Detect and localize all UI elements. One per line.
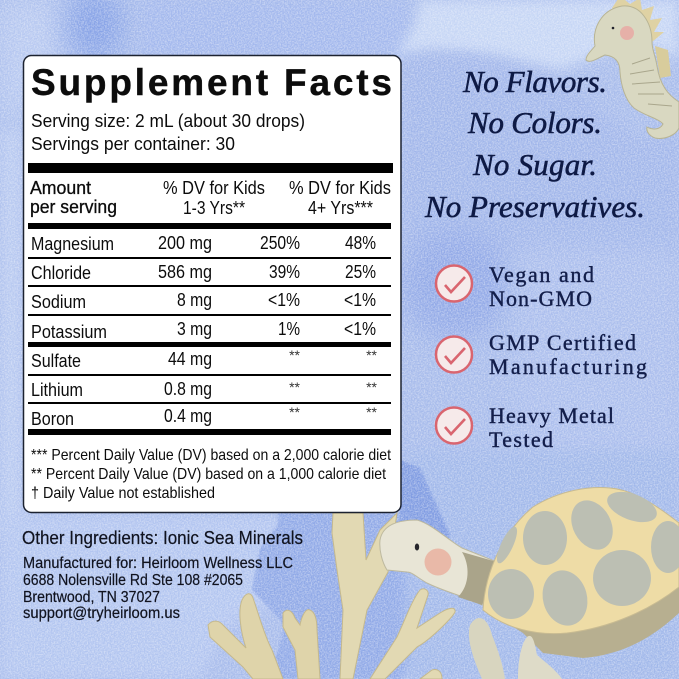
claims: no additives: No Flavors. <box>462 64 607 99</box>
table rows: nutrients: 200 mg <box>158 233 212 253</box>
claims: no additives <box>424 64 645 224</box>
manufacturer address: Manufactured for: Heirloom Wellness LLC <box>23 555 293 572</box>
illustration: turtle <box>380 486 679 679</box>
table rows: nutrients: Magnesium <box>31 234 114 254</box>
icon: check heavy metal <box>436 408 472 444</box>
table rows: nutrients: <1% <box>344 319 376 339</box>
claim: gmp: GMP Certified <box>489 330 636 355</box>
table rows: nutrients: ** <box>289 404 301 420</box>
table rows: nutrients: 39% <box>269 262 300 282</box>
footnotes <box>31 447 391 502</box>
other ingredients: Other Ingredients: Ionic Sea Minerals <box>22 528 303 548</box>
claim: heavy metal: Tested <box>489 427 553 452</box>
table rows: nutrients: <1% <box>268 290 300 310</box>
title: Supplement Facts <box>31 62 392 103</box>
table rows: nutrients: ** <box>289 379 301 395</box>
table rows: nutrients: Boron <box>31 409 74 429</box>
claims: no additives: No Colors. <box>467 105 602 140</box>
table rows: nutrients: 3 mg <box>177 319 212 339</box>
serving info <box>31 111 305 154</box>
illustration: seahorse <box>586 0 679 138</box>
serving info: Serving size: 2 mL (about 30 drops) <box>31 111 305 131</box>
table rows: nutrients: Sulfate <box>31 351 81 371</box>
claim: heavy metal: Heavy Metal <box>489 403 614 428</box>
table rows: nutrients: ** <box>366 347 378 363</box>
manufacturer address: Brentwood, TN 37027 <box>23 589 160 606</box>
footnotes: *** Percent Daily Value (DV) based on a 2,000 calorie diet <box>31 447 391 464</box>
table rows: nutrients <box>28 233 391 435</box>
table rows: nutrients: ** <box>289 347 301 363</box>
footnotes: † Daily Value not established <box>31 485 215 502</box>
table rows: nutrients: Lithium <box>31 380 83 400</box>
table rows: nutrients: 250% <box>260 233 300 253</box>
table rows: nutrients: Chloride <box>31 263 91 283</box>
table header: % DV for Kids <box>289 178 391 198</box>
illustration: coral center <box>332 513 455 679</box>
manufacturer address: 6688 Nolensville Rd Ste 108 #2065 <box>23 572 243 589</box>
table header: % DV for Kids <box>163 178 265 198</box>
claim: heavy metal <box>489 403 614 452</box>
icon: check gmp <box>436 336 472 372</box>
claim: vegan <box>489 262 594 311</box>
panel: supplement facts <box>24 56 401 512</box>
table rows: nutrients: Potassium <box>31 322 107 342</box>
table rows: nutrients: 8 mg <box>177 290 212 310</box>
claim: gmp: Manufacturing <box>489 354 647 379</box>
table rows: nutrients: 586 mg <box>158 262 212 282</box>
table rows: nutrients: 48% <box>345 233 376 253</box>
table header: 1-3 Yrs** <box>183 198 245 218</box>
claim: vegan: Non-GMO <box>489 286 592 311</box>
table rows: nutrients: Sodium <box>31 292 86 312</box>
table rows: nutrients: ** <box>366 379 378 395</box>
table rows: nutrients: 0.8 mg <box>164 379 212 399</box>
manufacturer address <box>23 555 293 622</box>
serving info: Servings per container: 30 <box>31 134 235 154</box>
table rows: nutrients: 0.4 mg <box>164 406 212 426</box>
claims: no additives: No Sugar. <box>472 147 597 182</box>
table rows: nutrients: 1% <box>278 319 300 339</box>
table rows: nutrients: <1% <box>344 290 376 310</box>
table header: Amount <box>30 178 91 198</box>
table rows: nutrients: 44 mg <box>168 349 212 369</box>
table header <box>28 163 393 229</box>
table rows: nutrients: 25% <box>345 262 376 282</box>
claim: vegan: Vegan and <box>489 262 594 287</box>
icon: check vegan <box>436 266 472 302</box>
footnotes: ** Percent Daily Value (DV) based on a 1,000 calorie diet <box>31 466 386 483</box>
claims: no additives: No Preservatives. <box>424 189 645 224</box>
table header: 4+ Yrs*** <box>308 198 373 218</box>
claim: gmp <box>489 330 647 379</box>
table header: per serving <box>30 197 117 217</box>
table rows: nutrients: ** <box>366 404 378 420</box>
illustration: coral left <box>208 594 320 679</box>
manufacturer address: support@tryheirloom.us <box>23 605 180 622</box>
